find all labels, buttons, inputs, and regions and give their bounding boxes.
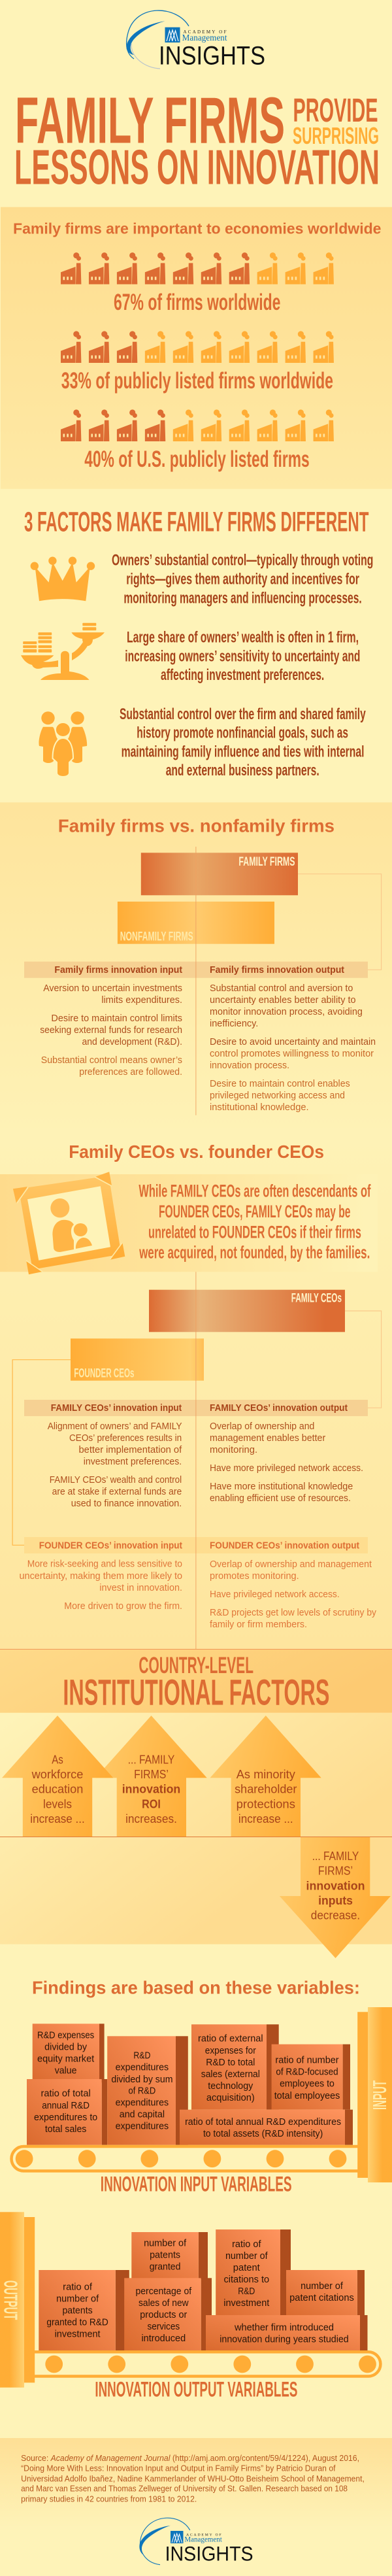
box: R&D expenditures divided by sum: expenditures [116, 2063, 169, 2073]
box: ratio of R&D-focused employees: total employees [274, 2091, 340, 2101]
box: R&D expenses divided by equity market value: divided by [44, 2042, 88, 2052]
box: patents granted to R&D investment [39, 2270, 129, 2350]
panel: innovation output variables [0, 2212, 380, 2401]
table header: family CEOs innovation: FAMILY CEOs’ innovation input [51, 1402, 182, 1414]
text: nonfinancial goals [120, 705, 366, 779]
box: R&D expenses divided by equity market value: value [55, 2065, 76, 2076]
icon row: 33 percent factories [61, 331, 334, 363]
text: family firms innovation input [40, 983, 182, 1077]
text: founder CEOs innovation output [210, 1559, 377, 1630]
arrow down: innovation inputs decrease: ... FAMILY [312, 1850, 359, 1863]
box: ratio of external expenses: sales (external [201, 2069, 260, 2080]
table header: family firms innovation [24, 962, 368, 978]
conveyor belt: input [12, 2146, 378, 2171]
bar: founder CEOs: FOUNDER CEOs [74, 1366, 135, 1381]
table header: family firms innovation: Family firms innovation output [210, 964, 344, 975]
box: number of patents granted: number of [144, 2238, 187, 2248]
table header: family firms innovation: Family firms innovation input [54, 964, 182, 975]
arrow up: minority shareholder protections: increase ... [238, 1812, 293, 1825]
heading: family CEOs vs founder CEOs: Family CEOs vs. founder CEOs [69, 1142, 324, 1162]
source citation: and Marc van Essen and Thomas Zellweger of University of St. Gallen. Research based on 108 [21, 2484, 348, 2494]
connector: family firms to output [298, 874, 382, 970]
source citation: Universidad Adolfo Ibañez, Nadine Kammerlander of WHU-Otto Beisheim School of Management, [21, 2473, 365, 2483]
table header: founder CEOs innovation [24, 1537, 368, 1553]
icon: crown [31, 557, 95, 601]
box: patent citations to R&D investment: citations to [223, 2275, 269, 2285]
bar: family CEOs: FAMILY CEOs [291, 1291, 342, 1306]
arrow down: innovation inputs decrease [280, 1837, 391, 1958]
panel: 3 factors [21, 507, 373, 779]
box: percentage of sales of new products [124, 2278, 212, 2350]
table header: founder CEOs innovation: FOUNDER CEOs’ innovation input [39, 1540, 182, 1551]
text: family firms innovation input: preferences are followed. [79, 1067, 182, 1077]
source citation: primary studies in 42 countries from 1981 to 2012. [21, 2494, 197, 2504]
box: percentage of sales of new products: introduced [141, 2333, 186, 2344]
stat: 67 percent: 67% of firms worldwide [114, 290, 280, 315]
text: family firms innovation input: and development (R&D). [82, 1037, 182, 1047]
logo: footer Academy of Management Insights: Management [184, 2535, 223, 2543]
box: ratio of external expenses: expenses for [205, 2046, 256, 2056]
panel: institutional factors [0, 1649, 392, 1958]
box: number of patent citations: patent citations [289, 2293, 354, 2303]
panel: family firms vs nonfamily firms [0, 802, 392, 1136]
text: family CEOs innovation input: investment preferences. [84, 1457, 182, 1467]
box: number of patent citations [286, 2270, 365, 2315]
text: family firms innovation output: monitor innovation process, avoiding [210, 1007, 363, 1017]
callout text [139, 1181, 371, 1263]
box: R&D expenses divided by equity market value [33, 2024, 105, 2082]
box: number of patents granted [131, 2232, 208, 2279]
logo: footer Academy of Management Insights: INSIGHTS [165, 2542, 253, 2566]
logo: Academy of Management Insights [126, 10, 265, 70]
box: number of patent citations: number of [301, 2281, 344, 2292]
arrow down: innovation inputs decrease: FIRMS’ [318, 1865, 353, 1878]
box: ratio of total annual R&D expenditures to total sales: total sales [45, 2124, 86, 2135]
text: founder CEOs innovation input: invest in innovation. [99, 1583, 182, 1593]
box: R&D expenditures divided by sum: expenditures [116, 2098, 169, 2109]
table header: family CEOs innovation [24, 1400, 368, 1416]
box: ratio of total annual R&D expenditures to total sales [27, 2079, 107, 2145]
box: whether firm introduced innovation [206, 2315, 367, 2350]
text: founder CEOs innovation output: promotes monitoring. [210, 1571, 299, 1582]
title [14, 84, 380, 195]
box: ratio of R&D-focused employees: of R&D-focused [276, 2067, 338, 2078]
arrow up: minority shareholder protections: shareholder [235, 1783, 297, 1796]
box: R&D expenditures divided by sum: expenditures [116, 2122, 169, 2132]
text: family CEOs innovation input: better implementation of [78, 1445, 182, 1455]
text: owners' substantial control [112, 551, 373, 607]
arrow down: innovation inputs decrease: decrease. [311, 1909, 360, 1922]
icon: framed family photo [13, 1172, 125, 1274]
box: ratio of external expenses: acquisition) [206, 2093, 255, 2103]
box: ratio of external expenses: R&D to total [206, 2058, 255, 2068]
text: family firms innovation output: Desire to avoid uncertainty and maintain [210, 1037, 376, 1047]
box: number of patents granted: patents [150, 2250, 180, 2261]
heading: economies worldwide: Family firms are important to economies worldwide [13, 220, 382, 237]
source citation: “Doing More With Less: Innovation Input and Output in Family Firms” by Patricio Duran of [21, 2464, 336, 2473]
bar: nonfamily firms: NONFAMILY FIRMS [120, 930, 193, 944]
text: family CEOs innovation input: Alignment of owners’ and FAMILY [48, 1421, 182, 1432]
text: family firms innovation input: Desire to maintain control limits [51, 1013, 182, 1024]
connector: family CEOs to output [345, 1311, 382, 1408]
box: number of patents granted: granted [150, 2262, 180, 2273]
arrow up: workforce education: education [32, 1783, 83, 1796]
text: owners' wealth [125, 628, 360, 684]
text: founder CEOs innovation output: Overlap of ownership and management [210, 1559, 372, 1570]
center axis line [195, 1272, 197, 1649]
text: founder CEOs innovation output: family or firm members. [210, 1619, 307, 1630]
box: patents granted to R&D investment: number of [56, 2294, 99, 2304]
conveyor belt: output [16, 2352, 380, 2376]
panel: footer [0, 2438, 392, 2576]
icon: balance scale with coins [21, 623, 105, 680]
box: percentage of sales of new products: services [147, 2322, 180, 2332]
box: R&D expenditures divided by sum: of R&D [129, 2086, 155, 2097]
heading: findings based on variables: Findings are based on these variables: [32, 1977, 360, 1997]
text: family CEOs innovation output: Have more privileged network access. [210, 1463, 363, 1474]
text: founder CEOs innovation input: uncertainty, making them more likely to [20, 1571, 182, 1582]
logo: Academy of Management Insights: Management [182, 33, 227, 43]
bar: nonfamily firms [118, 902, 274, 944]
text: family firms innovation output: inefficiency. [210, 1019, 258, 1029]
box: percentage of sales of new products: percentage of [135, 2286, 192, 2297]
text: family firms innovation output: Desire to maintain control enables [210, 1079, 350, 1089]
text: family firms innovation input: Aversion to uncertain investments [43, 983, 182, 994]
text: family firms innovation input: seeking external funds for research [40, 1025, 182, 1036]
box: R&D expenditures divided by sum: and capital [120, 2110, 165, 2120]
arrow up: workforce education: levels [43, 1797, 72, 1810]
roller: output label [0, 2212, 35, 2388]
text: family firms innovation output [210, 983, 376, 1113]
box: whether firm introduced innovation: innovation during years studied [220, 2334, 349, 2345]
text: founder CEOs innovation input: More driven to grow the firm. [64, 1601, 182, 1612]
icon row: 67 percent factories [61, 252, 334, 284]
table header: family CEOs innovation: FAMILY CEOs’ innovation output [210, 1402, 348, 1414]
box: patents granted to R&D investment: investment [55, 2330, 101, 2340]
box: ratio of total annual R&D expenditures to total sales: ratio of total [41, 2089, 91, 2099]
box: ratio of external expenses: ratio of external [198, 2034, 263, 2044]
box: patent citations to R&D investment: number of [225, 2251, 269, 2262]
icon row: 40 percent factories [61, 409, 334, 441]
arrow up: minority shareholder protections [210, 1716, 321, 1837]
text: family firms innovation output: innovation process. [210, 1060, 289, 1071]
logo: footer Academy of Management Insights [139, 2518, 253, 2566]
box: patents granted to R&D investment: granted to R&D [46, 2318, 108, 2328]
box: patents granted to R&D investment: ratio of [63, 2282, 93, 2292]
text: family CEOs innovation output: Have more institutional knowledge [210, 1482, 353, 1492]
text: family CEOs innovation output: monitoring. [210, 1445, 257, 1455]
text: family CEOs innovation input [48, 1421, 182, 1509]
arrow up: innovation ROI increases [95, 1716, 207, 1837]
text: family CEOs innovation output: management enables better [210, 1433, 325, 1444]
box: R&D intensity [180, 2110, 353, 2145]
text: family firms innovation input: Substantial control means owner’s [41, 1055, 182, 1066]
heading band: country-level institutional factors: COUNTRY-LEVEL [139, 1653, 253, 1678]
text: family firms innovation output: control promotes willingness to monitor [210, 1049, 374, 1059]
text: founder CEOs innovation input: More risk-seeking and less sensitive to [27, 1559, 182, 1570]
table header: founder CEOs innovation: FOUNDER CEOs’ innovation output [210, 1540, 359, 1551]
text: family firms innovation output: uncertainty enables better ability to [210, 995, 355, 1006]
box: R&D expenditures divided by sum [107, 2036, 188, 2145]
arrow up: workforce education [2, 1716, 113, 1837]
text: family CEOs innovation input: are at stake if external funds are [52, 1487, 182, 1497]
box: patent citations to R&D investment: R&D [238, 2286, 255, 2297]
text: family CEOs innovation output [210, 1421, 363, 1504]
arrow up: minority shareholder protections: protections [237, 1797, 295, 1810]
box: patents granted to R&D investment: patents [62, 2306, 93, 2316]
box: patent citations to R&D investment: patent [233, 2263, 260, 2273]
arrow up: innovation ROI increases: innovation [122, 1783, 180, 1796]
arrow up: minority shareholder protections: As minority [237, 1768, 295, 1781]
arrow down: innovation inputs decrease: innovation [306, 1879, 365, 1892]
arrow up: workforce education: workforce [31, 1768, 83, 1781]
text: family firms innovation output: privileged networking access and [210, 1091, 345, 1101]
logo: Academy of Management Insights: ACADEMY OF [183, 29, 227, 35]
box: ratio of R&D-focused employees [272, 2044, 350, 2110]
bar: founder CEOs [71, 1338, 204, 1381]
box: patent citations to R&D investment [216, 2229, 291, 2315]
box: ratio of R&D-focused employees: ratio of number [275, 2056, 339, 2066]
box: percentage of sales of new products: sales of new [139, 2298, 189, 2309]
center axis line [195, 847, 197, 1115]
box: ratio of external expenses: technology [208, 2081, 253, 2092]
text: founder CEOs innovation input [20, 1559, 182, 1612]
bar: family firms [141, 853, 298, 895]
text: family firms innovation input: limits expenditures. [101, 995, 182, 1006]
text: family CEOs innovation input: CEOs’ preferences results in [69, 1433, 182, 1444]
heading: family firms vs nonfamily: Family firms vs. nonfamily firms [58, 816, 335, 836]
logo: Academy of Management Insights: INSIGHTS [159, 41, 265, 70]
bar: family firms: FAMILY FIRMS [238, 855, 295, 869]
box: whether firm introduced innovation: whether firm introduced [234, 2322, 334, 2333]
box: ratio of external expenses [191, 2024, 279, 2110]
text: founder CEOs innovation output: Have privileged network access. [210, 1589, 340, 1600]
box: ratio of total annual R&D expenditures to total sales: expenditures to [34, 2112, 97, 2123]
box: R&D expenses divided by equity market value: equity market [37, 2054, 94, 2064]
text: family firms innovation output: institutional knowledge. [210, 1102, 309, 1113]
heading band: country-level institutional factors [0, 1649, 392, 1713]
bar: family CEOs [149, 1290, 345, 1332]
box: patent citations to R&D investment: investment [223, 2298, 269, 2309]
text: family CEOs innovation input: FAMILY CEOs’ wealth and control [50, 1475, 182, 1485]
box: ratio of total annual R&D expenditures to total sales: annual R&D [42, 2101, 90, 2111]
panel: family firms are important [1, 207, 392, 489]
arrow up: innovation ROI increases: ... FAMILY [128, 1753, 174, 1766]
panel: family CEOs vs founder CEOs [0, 1136, 392, 1649]
callout band [0, 1174, 378, 1272]
text: family CEOs innovation output: enabling efficient use of resources. [210, 1493, 351, 1504]
box: R&D intensity: to total assets (R&D intensity) [203, 2129, 323, 2139]
logo: footer Academy of Management Insights: ACADEMY OF [186, 2533, 221, 2537]
connector: founder CEOs to input [12, 1360, 71, 1545]
box: ratio of R&D-focused employees: employees to [280, 2079, 335, 2090]
arrow up: innovation ROI increases: increases. [125, 1812, 177, 1825]
arrow up: innovation ROI increases: FIRMS’ [134, 1768, 169, 1781]
panel: innovation input variables [12, 2007, 392, 2195]
roller: input label: INPUT [370, 2080, 391, 2110]
text: family firms innovation output: Substantial control and aversion to [210, 983, 353, 994]
roller: output label: OUTPUT [0, 2280, 21, 2320]
arrow up: innovation ROI increases: ROI [142, 1797, 161, 1810]
icon: family of three people [39, 711, 87, 777]
box: R&D expenditures divided by sum: divided by sum [111, 2075, 172, 2085]
arrow up: workforce education: increase ... [30, 1812, 85, 1825]
source citation [21, 2453, 365, 2504]
text: founder CEOs innovation output: R&D projects get low levels of scrutiny by [210, 1608, 377, 1618]
arrow up: workforce education: As [52, 1753, 63, 1766]
box: R&D intensity: ratio of total annual R&D expenditures [185, 2117, 341, 2127]
box: R&D expenditures divided by sum: R&D [133, 2050, 150, 2061]
box: patent citations to R&D investment: ratio of [232, 2239, 261, 2250]
text: family CEOs innovation output: Overlap of ownership and [210, 1421, 314, 1432]
box: percentage of sales of new products: products or [140, 2310, 187, 2320]
source citation: Source: Academy of Management Journal (http://amj.aom.org/content/59/4/1224), August 2016, [21, 2453, 359, 2463]
box: R&D expenses divided by equity market value: R&D expenses [37, 2030, 94, 2041]
roller: input label [357, 2007, 392, 2182]
text: family CEOs innovation input: used to finance innovation. [71, 1499, 182, 1509]
arrow down: innovation inputs decrease: inputs [318, 1894, 353, 1907]
